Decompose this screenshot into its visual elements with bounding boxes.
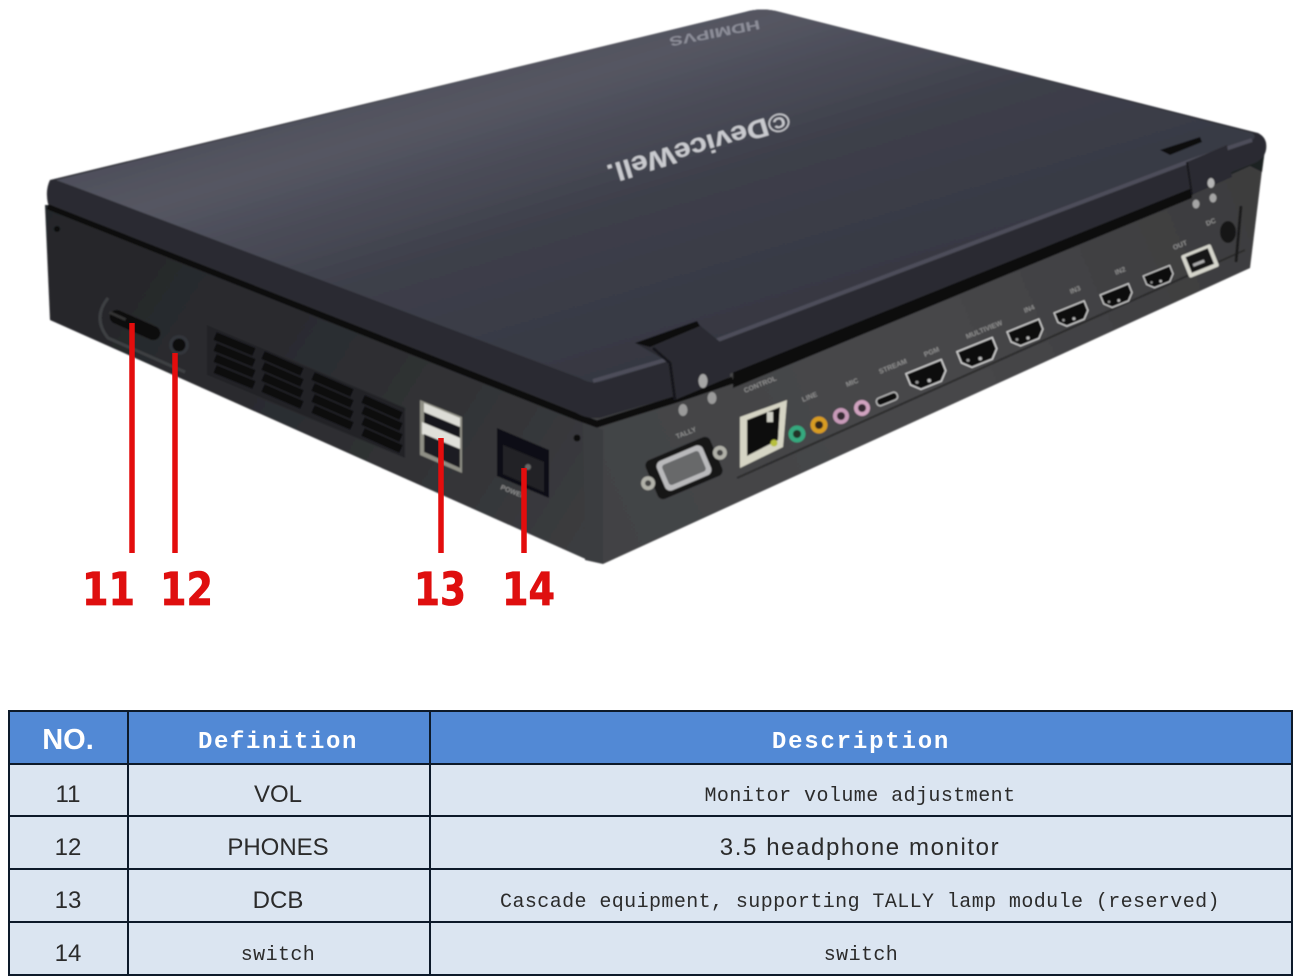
- callout line 14: [521, 468, 527, 553]
- port labels: [499, 218, 1217, 501]
- audio jacks: [788, 400, 870, 442]
- table: port definitions: [9, 711, 1292, 975]
- rear panel base line: [737, 250, 1245, 478]
- port labels: STREAM: [878, 358, 908, 376]
- callout number 13: 13: [414, 563, 466, 616]
- model label on lid: HDMIPVS: [668, 17, 761, 49]
- table body background: [9, 764, 1292, 975]
- port labels: POWER: [499, 484, 526, 501]
- port labels: IN4: [1023, 304, 1036, 315]
- callout number 11: 11: [82, 563, 135, 616]
- row 11: [56, 781, 1016, 808]
- device front panel: [45, 205, 592, 561]
- callout line 11: [129, 323, 135, 553]
- headphone jack: [169, 335, 189, 355]
- hinge: right: [1160, 137, 1232, 208]
- power switch: [497, 428, 549, 498]
- callout number 14: 14: [502, 563, 555, 616]
- port labels: MULTIVIEW: [965, 320, 1004, 341]
- hinge: left: [635, 321, 730, 416]
- port labels: LINE: [801, 391, 819, 404]
- row 14: 14: [55, 940, 81, 967]
- screw hole right: [574, 434, 580, 442]
- device rear panel: [590, 150, 1262, 564]
- device lid top surface: [56, 10, 1255, 382]
- table header background: [9, 711, 1292, 764]
- row 14: switch: [824, 944, 898, 967]
- port labels: OUT: [1172, 240, 1189, 252]
- logo on lid: ©DeviceWell.: [603, 105, 794, 189]
- USB ports: [420, 400, 462, 473]
- device rear top end: [1190, 142, 1266, 192]
- stream USB-C port: [875, 391, 899, 407]
- callout line 12: [172, 353, 178, 553]
- DisplayPort-style output port: [1181, 244, 1219, 278]
- row 13: [55, 887, 1220, 914]
- lid shadow on front panel: [48, 206, 733, 424]
- row 12: [55, 834, 1000, 861]
- callout line 13: [438, 438, 444, 553]
- row 11: Monitor volume adjustment: [704, 785, 1016, 808]
- row 13: 13: [55, 887, 81, 914]
- port labels: DC: [1205, 218, 1217, 228]
- lid rear rim highlight: [593, 140, 1252, 381]
- lid body silhouette: [47, 10, 1266, 418]
- DC power socket: [1220, 206, 1241, 262]
- port labels: PGM: [923, 346, 941, 359]
- port labels: TALLY: [675, 426, 698, 441]
- port labels: IN3: [1069, 285, 1082, 296]
- row 14: switch: [241, 944, 315, 967]
- port labels: IN2: [1114, 266, 1127, 277]
- volume wheel: [100, 298, 185, 372]
- row 12: 3.5 headphone monitor: [720, 834, 1000, 861]
- row 13: Cascade equipment, supporting TALLY lamp module (reserved): [500, 891, 1220, 914]
- row 11: 11: [56, 781, 80, 808]
- header: Definition: Definition: [198, 729, 358, 756]
- port labels: MIC: [845, 378, 860, 389]
- row 12: 12: [55, 834, 81, 861]
- header: NO.: NO.: [42, 724, 94, 756]
- table grid: [9, 711, 1292, 975]
- row 13: DCB: [253, 887, 303, 914]
- device body and ports: [45, 10, 1266, 564]
- ventilation grille: [207, 325, 405, 458]
- row 14: [55, 940, 898, 967]
- rear panel slot shadow: [733, 187, 1192, 388]
- header: Description: Description: [772, 729, 950, 756]
- photo: video switcher device: [45, 10, 1266, 616]
- HDMI ports: [906, 265, 1175, 392]
- VGA port: [633, 431, 735, 505]
- screw hole: [54, 226, 60, 232]
- row 12: PHONES: [227, 834, 329, 861]
- corner strip: [583, 422, 603, 564]
- port labels: CONTROL: [743, 375, 779, 395]
- callout number 12: 12: [160, 563, 213, 616]
- row 11: VOL: [254, 781, 302, 808]
- ethernet port: [740, 400, 787, 468]
